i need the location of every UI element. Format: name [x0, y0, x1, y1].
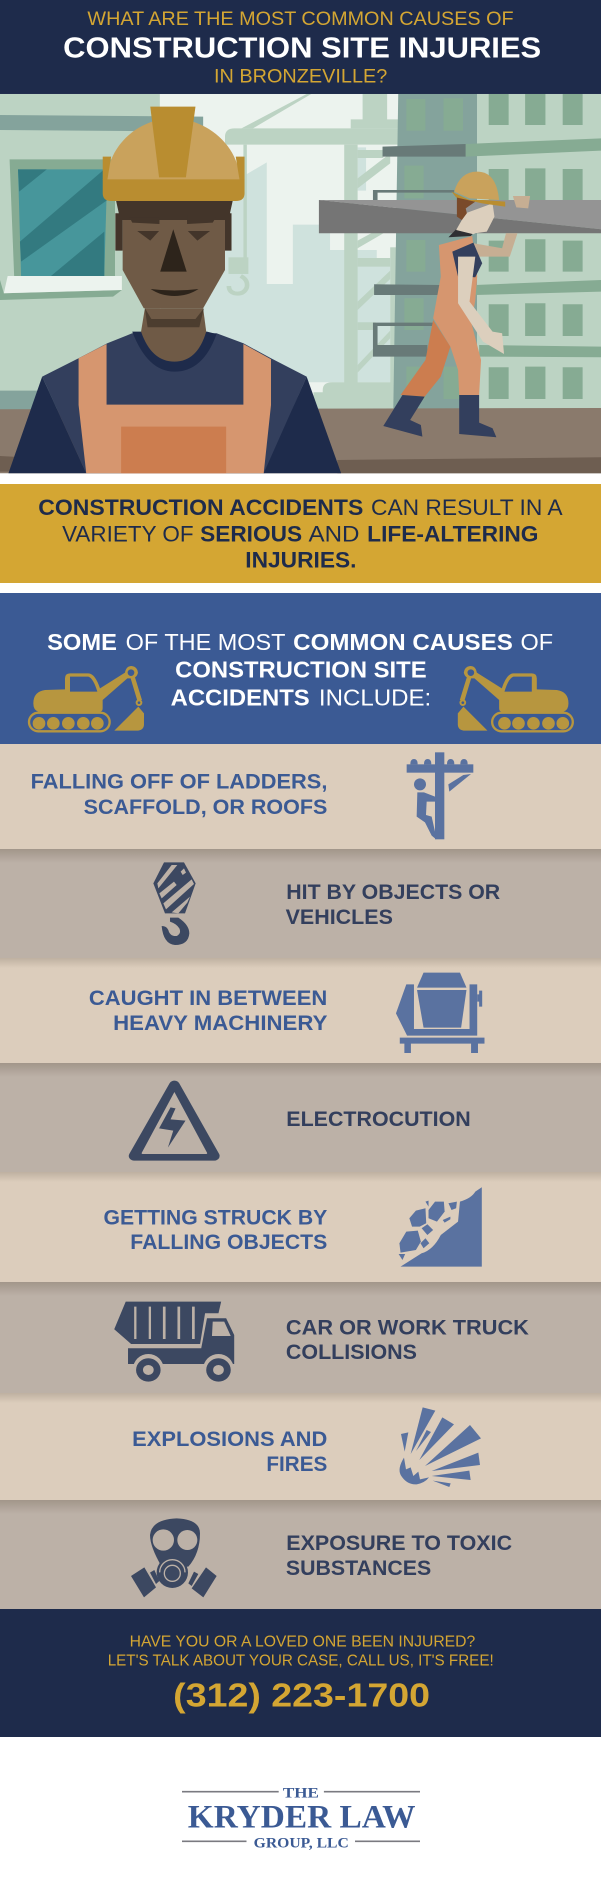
row: exposure to toxic substances: SUBSTANCES [286, 1557, 431, 1580]
logo: The Kryder Law Group: THE [283, 1785, 319, 1801]
row: getting struck by falling objects: GETTING STRUCK BY [104, 1206, 327, 1229]
row: explosions and fires: FIRES [266, 1453, 327, 1476]
blue section heading panel: INCLUDE: [319, 684, 431, 710]
right building [477, 94, 601, 411]
icon: dump truck [114, 1302, 234, 1384]
icon: excavator left [29, 666, 144, 731]
gold statement band: CONSTRUCTION ACCIDENTS [38, 495, 363, 520]
blue section heading panel: OF THE MOST [126, 629, 286, 655]
row: falling off of ladders: FALLING OFF OF LADDERS, [31, 770, 327, 793]
icon: cement mixer [396, 973, 484, 1053]
header banner: CONSTRUCTION SITE INJURIES [63, 32, 541, 64]
large worker in hard hat [8, 107, 341, 473]
row: explosions and fires: EXPLOSIONS AND [132, 1428, 327, 1451]
blue section heading panel: CONSTRUCTION SITE [175, 657, 427, 683]
header banner: IN BRONZEVILLE? [214, 66, 387, 88]
pale distant buildings [161, 147, 390, 382]
window [0, 159, 122, 300]
call to action panel: HAVE YOU OR A LOVED ONE BEEN INJURED? [130, 1634, 475, 1651]
gold statement band [0, 484, 601, 583]
logo: The Kryder Law Group: KRYDER LAW [188, 1800, 416, 1836]
gold statement band: LIFE-ALTERING [367, 521, 538, 546]
scaffold planks [373, 144, 466, 357]
icon: high voltage triangle [134, 1085, 214, 1156]
row: falling off of ladders: SCAFFOLD, OR ROOFS [84, 796, 327, 819]
row: caught in between heavy machinery: HEAVY MACHINERY [113, 1012, 327, 1035]
phone number: (312) 223-1700 [173, 1676, 430, 1714]
ground [0, 408, 601, 473]
crane hook [229, 276, 247, 294]
small worker carrying beam [383, 172, 530, 437]
call to action panel [0, 1609, 601, 1737]
row: car or work truck collisions: COLLISIONS [286, 1341, 417, 1364]
gold statement band: CAN RESULT IN A [371, 495, 563, 520]
illustration: construction workers at building site [0, 94, 601, 473]
blue section heading panel: SOME [47, 629, 117, 655]
icon: gas mask [131, 1518, 217, 1597]
icon: worker climbing utility pole [407, 752, 473, 839]
row: hit by objects or vehicles: VEHICLES [286, 906, 393, 929]
blue section heading panel: OF [520, 629, 553, 655]
row: caught in between heavy machinery: CAUGHT IN BETWEEN [89, 987, 327, 1010]
blue section heading panel: ACCIDENTS [171, 684, 310, 710]
row: hit by objects or vehicles [0, 849, 601, 958]
row: getting struck by falling objects: FALLING OBJECTS [130, 1231, 327, 1254]
gold statement band: INJURIES. [245, 548, 356, 573]
header banner [0, 0, 601, 94]
blue section heading panel: COMMON CAUSES [293, 629, 513, 655]
call to action panel: LET'S TALK ABOUT YOUR CASE, CALL US, IT'S FREE! [108, 1653, 494, 1670]
left building [0, 94, 160, 411]
row: exposure to toxic substances: EXPOSURE TO TOXIC [286, 1532, 512, 1555]
logo: The Kryder Law Group: GROUP, LLC [254, 1835, 349, 1851]
row: caught in between heavy machinery [0, 958, 601, 1063]
row: falling off of ladders [0, 744, 601, 849]
tower [393, 94, 477, 411]
row: exposure to toxic substances [0, 1500, 601, 1609]
icon: rockslide [399, 1187, 482, 1267]
row: explosions and fires [0, 1393, 601, 1500]
icon: explosion [400, 1407, 481, 1487]
row: car or work truck collisions: CAR OR WORK TRUCK [286, 1316, 529, 1339]
gold statement band: AND [308, 521, 360, 546]
row: getting struck by falling objects [0, 1172, 601, 1282]
icon: excavator right [458, 666, 573, 731]
row: electrocution [0, 1063, 601, 1172]
logo: The Kryder Law Group [182, 1785, 420, 1851]
blue section heading panel [0, 593, 601, 744]
gold statement band: SERIOUS [200, 521, 302, 546]
row: electrocution: ELECTROCUTION [286, 1108, 471, 1131]
concrete beam [319, 200, 601, 233]
gold statement band: VARIETY OF [62, 521, 194, 546]
header banner: WHAT ARE THE MOST COMMON CAUSES OF [87, 8, 514, 30]
row: car or work truck collisions [0, 1282, 601, 1393]
crane [225, 94, 399, 410]
row: hit by objects or vehicles: HIT BY OBJECTS OR [286, 881, 500, 904]
icon: crane hook [153, 862, 196, 945]
